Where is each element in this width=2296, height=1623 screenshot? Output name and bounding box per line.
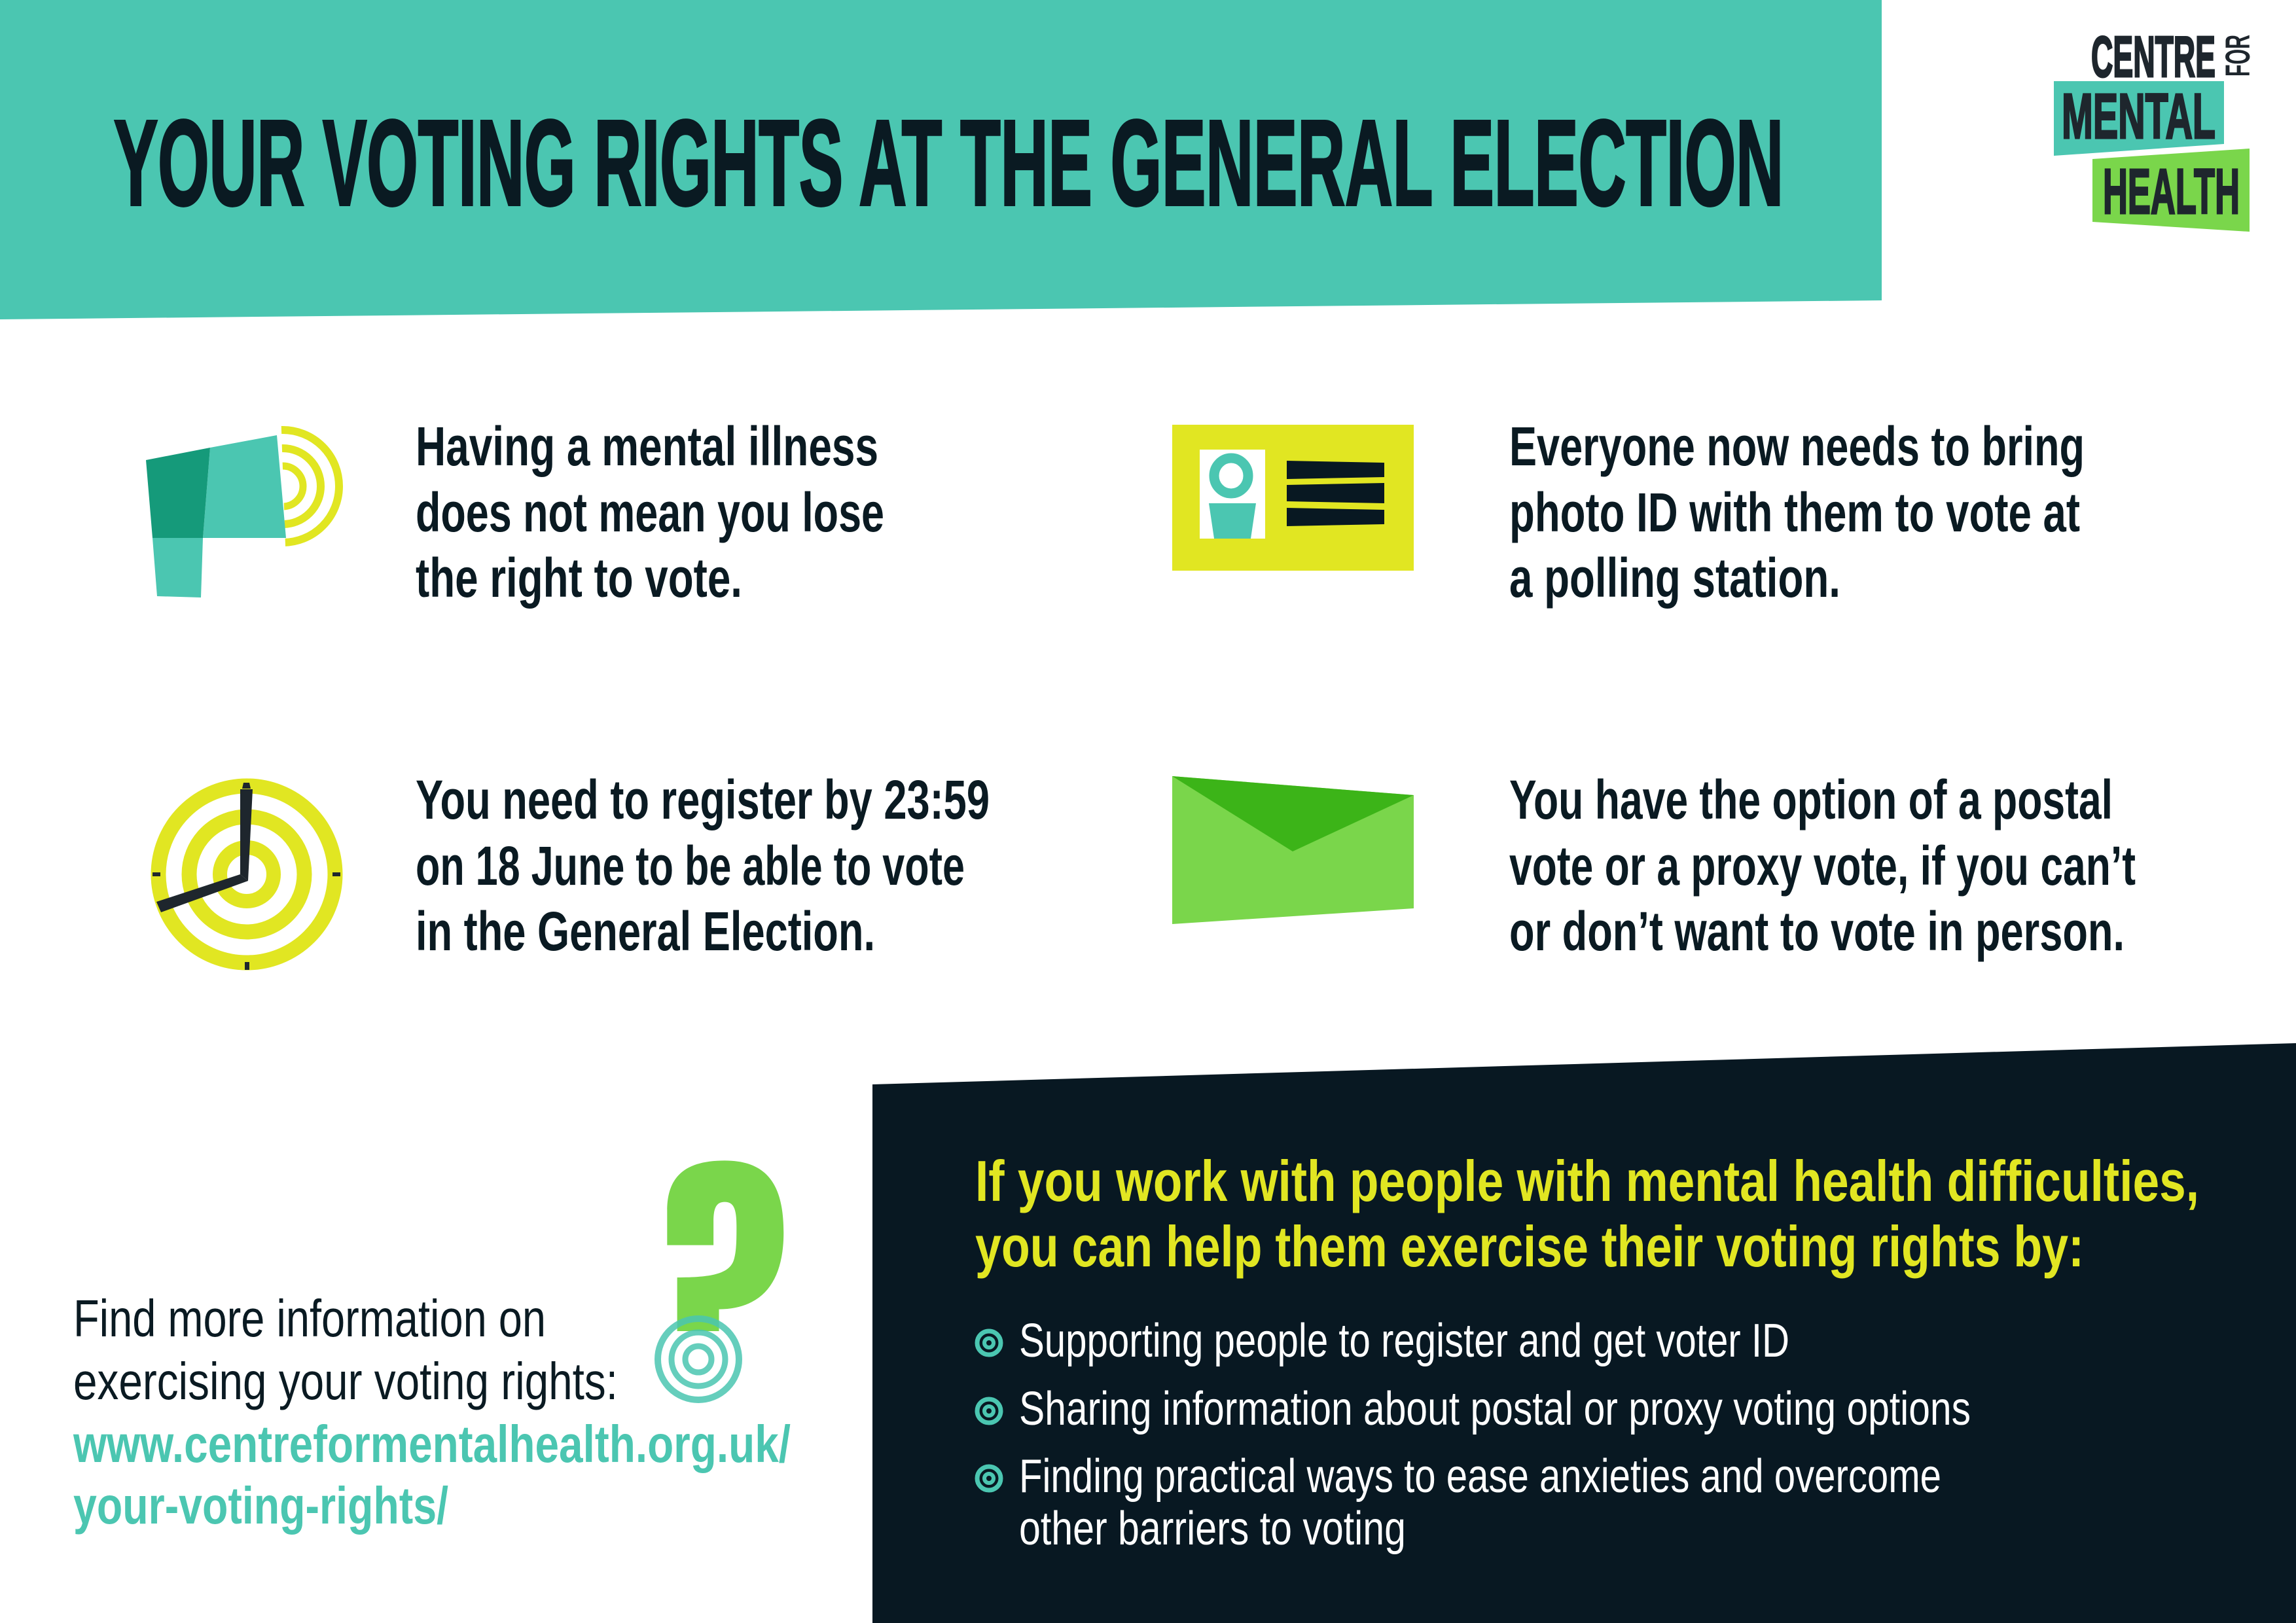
text: find more information	[73, 1289, 791, 1535]
logo	[2054, 24, 2257, 232]
icon: question mark	[658, 1160, 783, 1400]
text: find more information: www.centreformentalhealth.org.uk/	[73, 1415, 791, 1473]
text: find more information: your-voting-rights/	[73, 1476, 448, 1535]
text: mental illness: does not mean you lose	[416, 482, 884, 543]
text: find more information: exercising your voting rights:	[73, 1352, 618, 1410]
bullet list: other barriers to voting	[1019, 1503, 1406, 1555]
bullet list: Finding practical ways to ease anxieties and overcome	[1019, 1450, 1941, 1503]
header band	[0, 0, 1882, 319]
panel: how to help: you can help them exercise their voting rights by:	[975, 1214, 2084, 1279]
text: find more information: Find more information on	[73, 1289, 546, 1347]
bullet list	[977, 1315, 1971, 1555]
text: mental illness: Having a mental illness	[416, 416, 878, 477]
text: photo ID: photo ID with them to vote at	[1509, 482, 2080, 543]
icon: megaphone	[146, 430, 339, 597]
bullet list: Supporting people to register and get voter ID	[1019, 1315, 1789, 1367]
text: photo ID: Everyone now needs to bring	[1509, 416, 2085, 477]
text: register deadline	[416, 769, 990, 962]
icon: clock	[152, 783, 340, 970]
text: postal vote	[1509, 769, 2136, 962]
text: register deadline: in the General Election.	[416, 901, 875, 962]
icon: photo ID card	[1172, 425, 1414, 571]
text: register deadline: You need to register by 23:59	[416, 769, 990, 830]
text: photo ID: a polling station.	[1509, 547, 1840, 609]
icon: envelope	[1172, 776, 1414, 924]
bullet list: Sharing information about postal or proxy voting options	[1019, 1383, 1971, 1435]
text: register deadline: on 18 June to be able to vote	[416, 835, 965, 897]
logo: FOR	[2219, 35, 2257, 77]
text: mental illness	[416, 416, 884, 609]
panel: how to help	[872, 1043, 2296, 1623]
text: photo ID	[1509, 416, 2085, 609]
text: mental illness: the right to vote.	[416, 547, 742, 609]
